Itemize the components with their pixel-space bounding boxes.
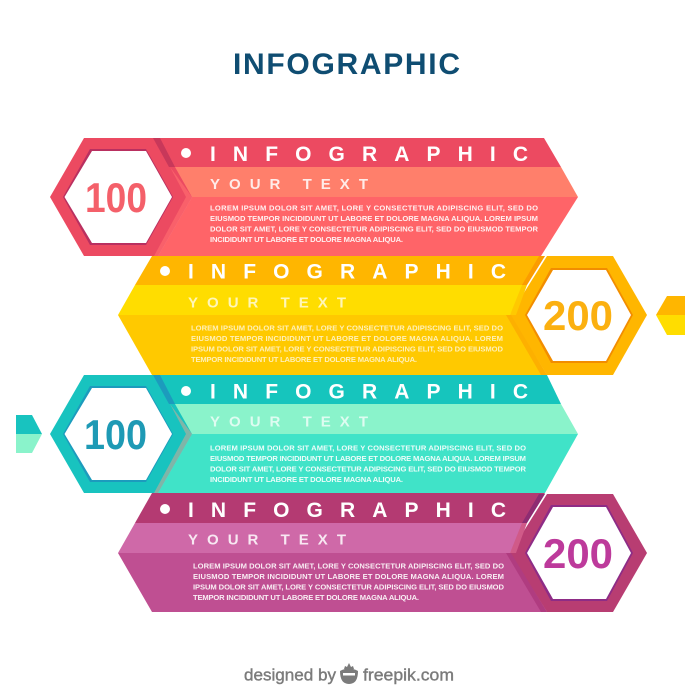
- red subheading: YOUR TEXT: [210, 176, 368, 193]
- red bullet: [181, 148, 191, 158]
- purple hexagon badge: [506, 494, 647, 612]
- purple body text: [193, 562, 505, 602]
- red body text: EIUSMOD TEMPOR INCIDIDUNT UT LABORE ET DOLORE MAGNA ALIQUA. LOREM IPSUM: [210, 214, 538, 223]
- panel: red: [50, 138, 578, 256]
- panel: teal: [16, 375, 578, 493]
- purple body text: LOREM IPSUM DOLOR SIT AMET, LORE Y CONSECTETUR ADIPISCING ELIT, SED DO: [193, 562, 504, 570]
- teal hexagon badge: [50, 375, 192, 493]
- purple body text: EIUSMOD TEMPOR INCIDIDUNT UT LABORE ET DOLORE MAGNA ALIQUA. LOREM: [193, 572, 504, 581]
- yellow body text: [191, 324, 504, 364]
- red body text: [210, 204, 539, 244]
- yellow body text: IPSUM DOLOR SIT AMET, LORE Y CONSECTETUR ADIPISCING ELIT, SED DO EIUSMOD: [191, 344, 504, 354]
- red hexagon badge: [50, 138, 192, 256]
- yellow body text: LOREM IPSUM DOLOR SIT AMET, LORE Y CONSECTETUR ADIPISCING ELIT, SED DO: [191, 324, 503, 332]
- yellow body text: EIUSMOD TEMPOR INCIDIDUNT UT LABORE ET DOLORE MAGNA ALIQUA. LOREM: [191, 334, 503, 343]
- teal body text: INCIDIDUNT UT LABORE ET DOLORE MAGNA ALIQUA.: [210, 475, 403, 484]
- red body text: LOREM IPSUM DOLOR SIT AMET, LORE Y CONSECTETUR ADIPISCING ELIT, SED DO: [210, 204, 538, 212]
- teal subheading: YOUR TEXT: [210, 414, 368, 430]
- teal number: 100: [84, 411, 147, 458]
- teal body text: [210, 444, 527, 484]
- red number: 100: [85, 174, 147, 221]
- red body text: DOLOR SIT AMET, LORE Y CONSECTETUR ADIPISCING ELIT, SED DO EIUSMOD TEMPOR: [210, 224, 539, 234]
- teal tag: [16, 415, 42, 453]
- panel: yellow: [118, 256, 685, 375]
- purple number: 200: [543, 530, 613, 577]
- yellow heading: INFOGRAPHIC: [188, 260, 506, 284]
- teal body text: DOLOR SIT AMET, LORE Y CONSECTETUR ADIPISCING ELIT, SED DO EIUSMOD TEMPOR: [210, 464, 527, 474]
- yellow tag: [656, 296, 685, 335]
- title: INFOGRAPHIC: [233, 48, 460, 81]
- teal body text: LOREM IPSUM DOLOR SIT AMET, LORE Y CONSECTETUR ADIPISCING ELIT, SED DO: [210, 444, 526, 452]
- footer credit: freepik.com: [363, 666, 454, 684]
- purple heading: INFOGRAPHIC: [188, 499, 506, 522]
- red body text: INCIDIDUNT UT LABORE ET DOLORE MAGNA ALIQUA.: [210, 235, 403, 244]
- purple subheading: YOUR TEXT: [188, 532, 346, 548]
- purple body text: IPSUM DOLOR SIT AMET, LORE Y CONSECTETUR ADIPISCING ELIT, SED DO EIUSMOD: [193, 582, 505, 592]
- footer credit: designed by: [244, 666, 336, 684]
- yellow hexagon badge: [506, 256, 647, 375]
- purple body text: TEMPOR INCIDIDUNT UT LABORE ET DOLORE MAGNA ALIQUA.: [193, 593, 419, 602]
- yellow body text: TEMPOR INCIDIDUNT UT LABORE ET DOLORE MAGNA ALIQUA.: [191, 355, 417, 364]
- footer credit: [244, 663, 454, 684]
- teal heading: INFOGRAPHIC: [210, 380, 528, 404]
- purple bullet: [160, 504, 170, 514]
- yellow subheading: YOUR TEXT: [188, 294, 346, 312]
- red banner: [155, 138, 578, 256]
- teal banner: [155, 375, 578, 493]
- purple banner: [118, 493, 547, 612]
- panel: purple: [118, 493, 647, 612]
- yellow number: 200: [543, 292, 613, 339]
- red heading: INFOGRAPHIC: [210, 143, 528, 166]
- yellow banner: [118, 256, 547, 375]
- teal bullet: [181, 386, 191, 396]
- teal body text: EIUSMOD TEMPOR INCIDIDUNT UT LABORE ET DOLORE MAGNA ALIQUA. LOREM IPSUM: [210, 454, 526, 463]
- yellow bullet: [160, 266, 170, 276]
- icon: freepik logo: [340, 663, 358, 684]
